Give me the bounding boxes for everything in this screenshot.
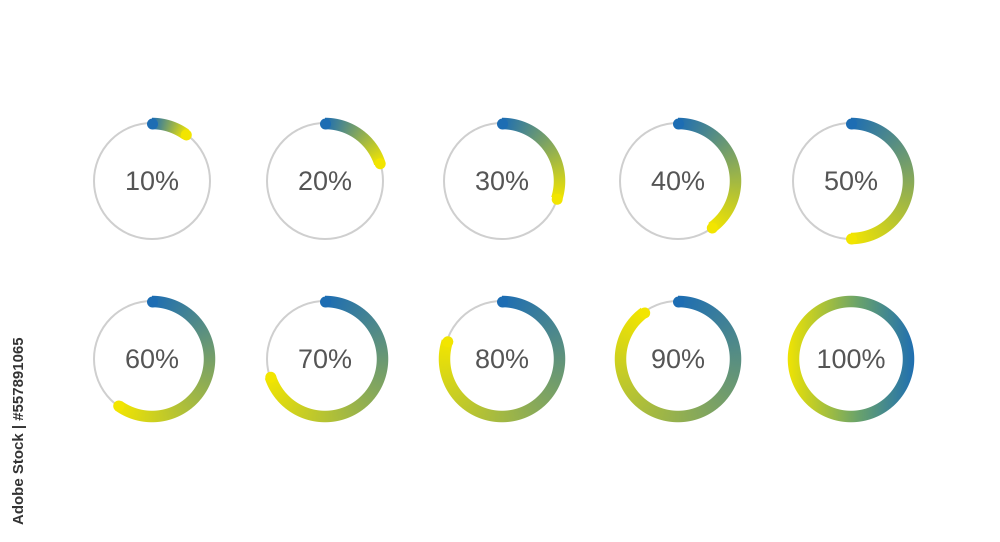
chart: 100%	[788, 296, 914, 422]
chart: 90%: 90%	[651, 344, 705, 374]
watermark text: Adobe Stock | #557891065	[10, 337, 27, 525]
chart: 50%: 50%	[824, 166, 878, 196]
chart: 10%	[93, 118, 211, 240]
chart: 90%	[614, 296, 742, 422]
chart: 60%	[93, 296, 216, 422]
chart: 40%	[619, 118, 742, 240]
chart: 10%: 10%	[125, 166, 179, 196]
chart: 20%: 20%	[298, 166, 352, 196]
chart: 50%	[792, 118, 914, 244]
chart: 20%	[266, 118, 386, 240]
chart: 30%: 30%	[475, 166, 529, 196]
chart: 40%: 40%	[651, 166, 705, 196]
chart: 60%: 60%	[125, 344, 179, 374]
chart: 30%	[443, 118, 566, 240]
chart: 80%: 80%	[475, 344, 529, 374]
chart: 100%: 100%	[816, 344, 886, 374]
chart: 70%	[264, 296, 388, 422]
chart: 80%	[438, 296, 566, 422]
chart: 70%: 70%	[298, 344, 352, 374]
